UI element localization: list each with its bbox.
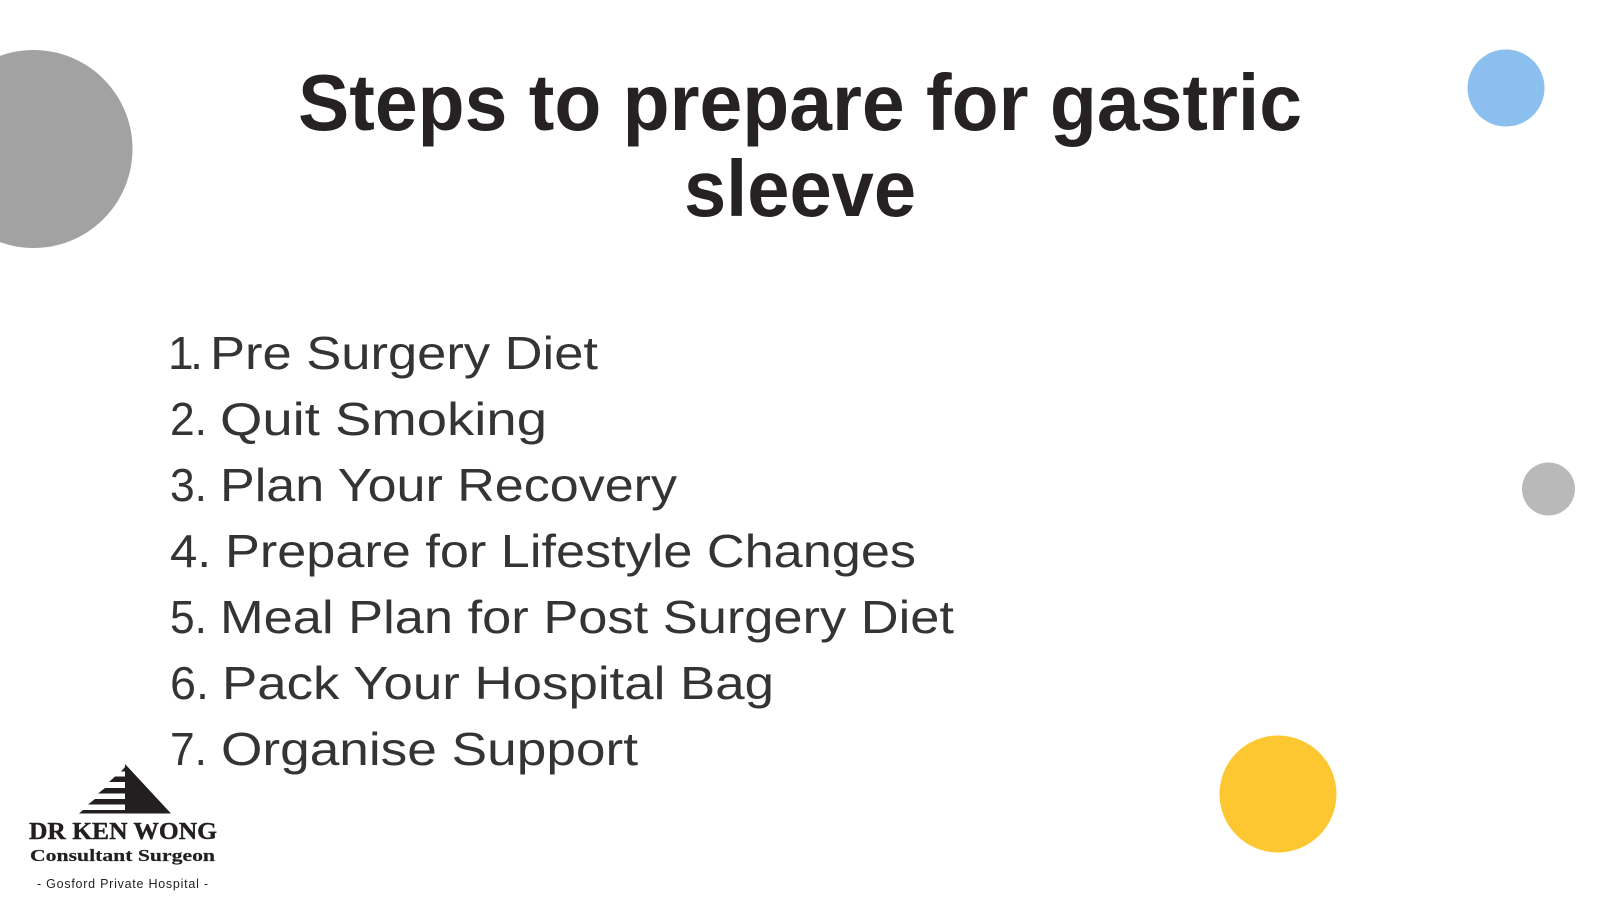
numbered list of steps: 5. bbox=[170, 591, 207, 643]
numbered list of steps: 7. bbox=[170, 723, 207, 775]
title bbox=[298, 58, 1302, 233]
numbered list of steps: Pack Your Hospital Bag bbox=[222, 657, 774, 709]
large gray circle bbox=[0, 50, 132, 248]
numbered list of steps: Prepare for Lifestyle Changes bbox=[225, 525, 916, 577]
yellow circle bbox=[1220, 736, 1336, 852]
numbered list of steps: Meal Plan for Post Surgery Diet bbox=[220, 591, 954, 643]
icon: striped pyramid bbox=[79, 764, 171, 814]
numbered list of steps bbox=[168, 327, 954, 775]
numbered list of steps: Plan Your Recovery bbox=[220, 459, 677, 511]
numbered list of steps: Organise Support bbox=[221, 723, 638, 775]
logo hospital: - Gosford Private Hospital - bbox=[37, 877, 208, 891]
numbered list of steps: Quit Smoking bbox=[220, 393, 547, 445]
numbered list of steps: 4. bbox=[170, 525, 211, 577]
logo: Dr Ken Wong bbox=[29, 764, 217, 891]
numbered list of steps: Pre Surgery Diet bbox=[210, 327, 598, 379]
numbered list of steps: 1. bbox=[168, 327, 203, 379]
logo role: Consultant Surgeon bbox=[30, 846, 216, 865]
blue circle bbox=[1468, 50, 1544, 126]
small gray circle bbox=[1522, 462, 1575, 516]
numbered list of steps: 3. bbox=[170, 459, 207, 511]
title: Steps to prepare for gastric bbox=[298, 58, 1302, 147]
title: sleeve bbox=[684, 144, 916, 233]
logo name: DR KEN WONG bbox=[29, 819, 217, 845]
numbered list of steps: 6. bbox=[170, 657, 209, 709]
numbered list of steps: 2. bbox=[170, 393, 207, 445]
